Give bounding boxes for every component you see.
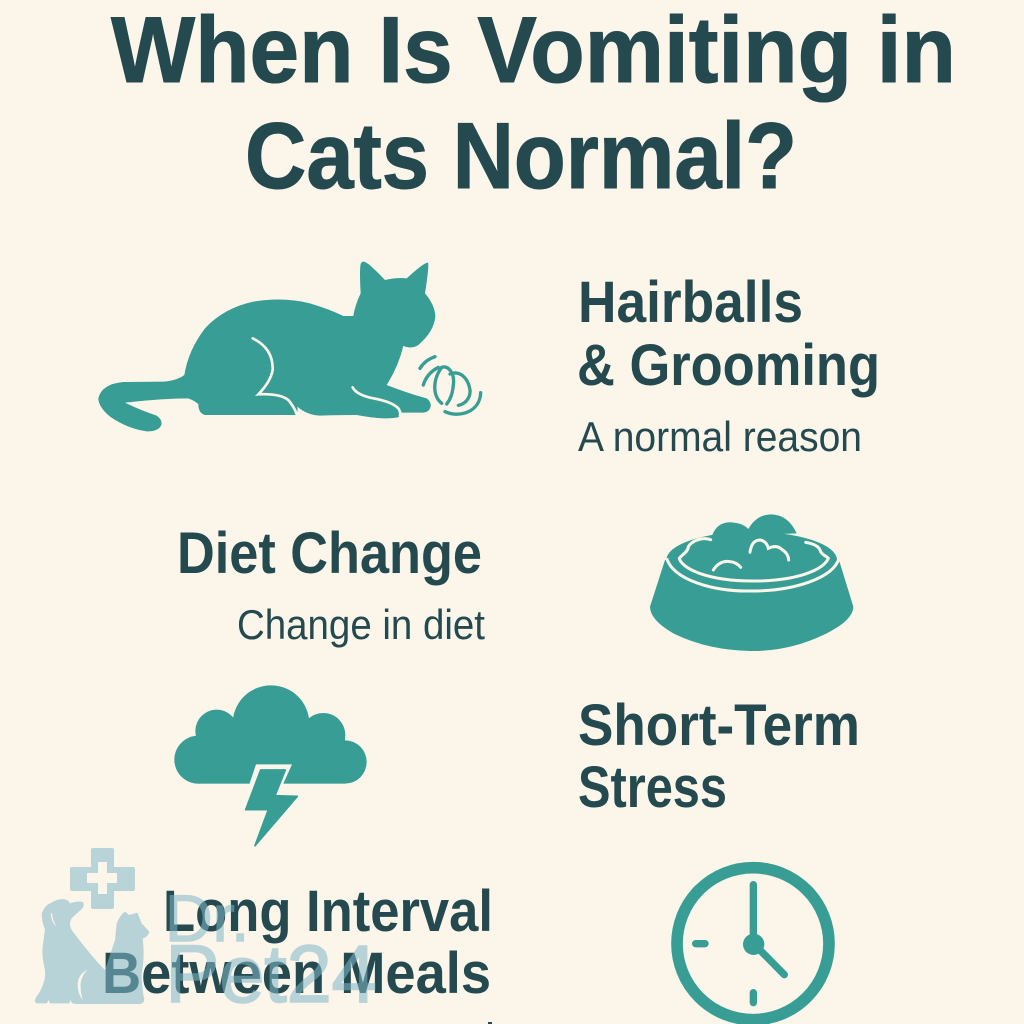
cut-off text mark	[488, 1022, 492, 1024]
heading: long interval between meals: Between Meals	[102, 941, 491, 1006]
heading: hairballs and grooming	[577, 270, 880, 398]
title: When Is Vomiting in	[111, 0, 956, 102]
icon: storm cloud	[174, 685, 367, 848]
watermark: Dr. Pet24 logo	[35, 848, 377, 1020]
title: Cats Normal?	[245, 103, 797, 208]
watermark: Dr. Pet24 logo: Pet24	[165, 929, 377, 1020]
icon: cat with yarn	[98, 262, 481, 431]
title	[111, 0, 956, 208]
heading: short-term stress: Short-Term	[578, 693, 860, 758]
heading: hairballs and grooming: Hairballs	[578, 270, 803, 335]
heading: diet change: Diet Change	[177, 521, 482, 586]
icon: medical cross	[70, 848, 135, 909]
heading: long interval between meals	[102, 879, 493, 1006]
heading: long interval between meals: Long Interval	[163, 879, 493, 944]
icon: food bowl	[650, 514, 853, 651]
heading: short-term stress	[578, 693, 860, 820]
icon: dog and cat silhouette	[35, 899, 149, 1004]
text: a normal reason: A normal reason	[578, 413, 862, 460]
heading: short-term stress: Stress	[578, 755, 727, 820]
text: change in diet: Change in diet	[237, 601, 485, 648]
watermark: Dr. Pet24 logo: Dr.	[165, 881, 249, 955]
heading: hairballs and grooming: & Grooming	[577, 333, 880, 398]
icon: clock	[677, 868, 829, 1020]
